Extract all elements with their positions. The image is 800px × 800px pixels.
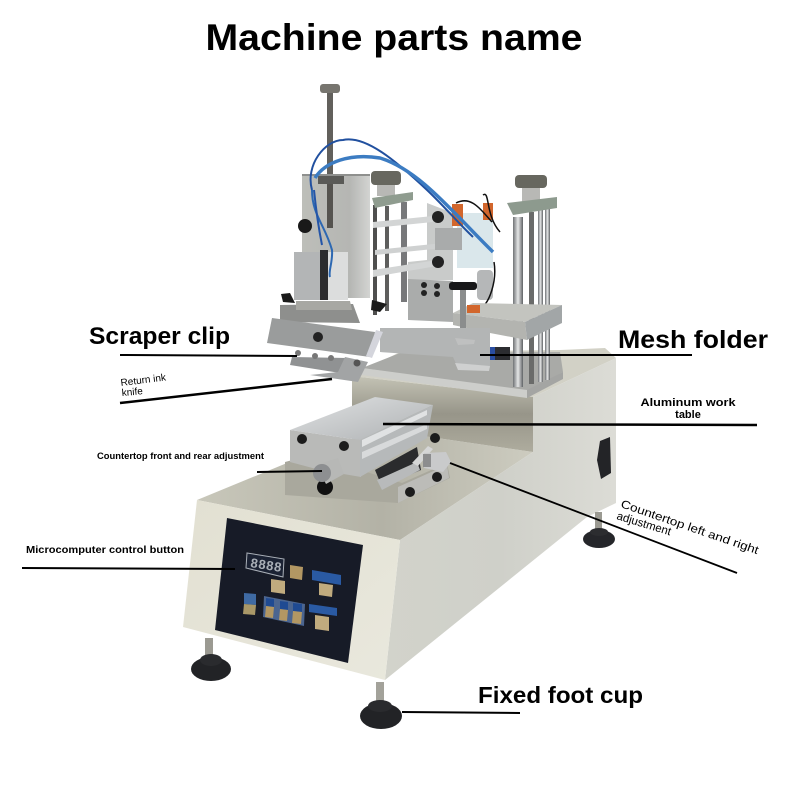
label: Aluminum work table: [383, 397, 757, 425]
label: Aluminum work table: table: [675, 409, 701, 421]
label: Fixed foot cup: Fixed foot cup: [478, 682, 643, 708]
label: Return ink knife: knife: [121, 386, 144, 399]
foot cups: [191, 512, 615, 729]
print head block: [294, 84, 370, 300]
machine body: [183, 348, 616, 680]
label: Countertop left and right adjustment: [450, 463, 761, 573]
label: Countertop left and right adjustment: adjustment: [615, 510, 673, 539]
label: Return ink knife: Return ink: [120, 372, 168, 389]
label: Scraper clip: Scraper clip: [89, 323, 230, 350]
base plate and support rods: [362, 202, 563, 398]
aluminum work table: [285, 397, 451, 503]
label: Mesh folder: Mesh folder: [618, 326, 768, 354]
mesh folder: [380, 328, 490, 371]
print carriage plate: [449, 282, 562, 340]
title: Machine parts name: [206, 17, 582, 58]
machine photo illustration: [183, 84, 616, 729]
label: Countertop left and right adjustment: Countertop left and right: [619, 498, 761, 557]
label: Return ink knife: [120, 372, 332, 403]
top plates and knobs: [371, 171, 557, 215]
label: Microcomputer control button: Microcomputer control button: [26, 545, 184, 556]
label: Aluminum work table: Aluminum work: [640, 397, 737, 409]
label: Countertop front and rear adjustment: Countertop front and rear adjustment: [97, 451, 264, 461]
control panel: 8888: [250, 555, 282, 575]
control panel: [215, 518, 363, 663]
cylinder assembly: [373, 194, 500, 322]
pneumatic tubes: [311, 139, 493, 277]
scraper clip assembly: [267, 293, 387, 382]
